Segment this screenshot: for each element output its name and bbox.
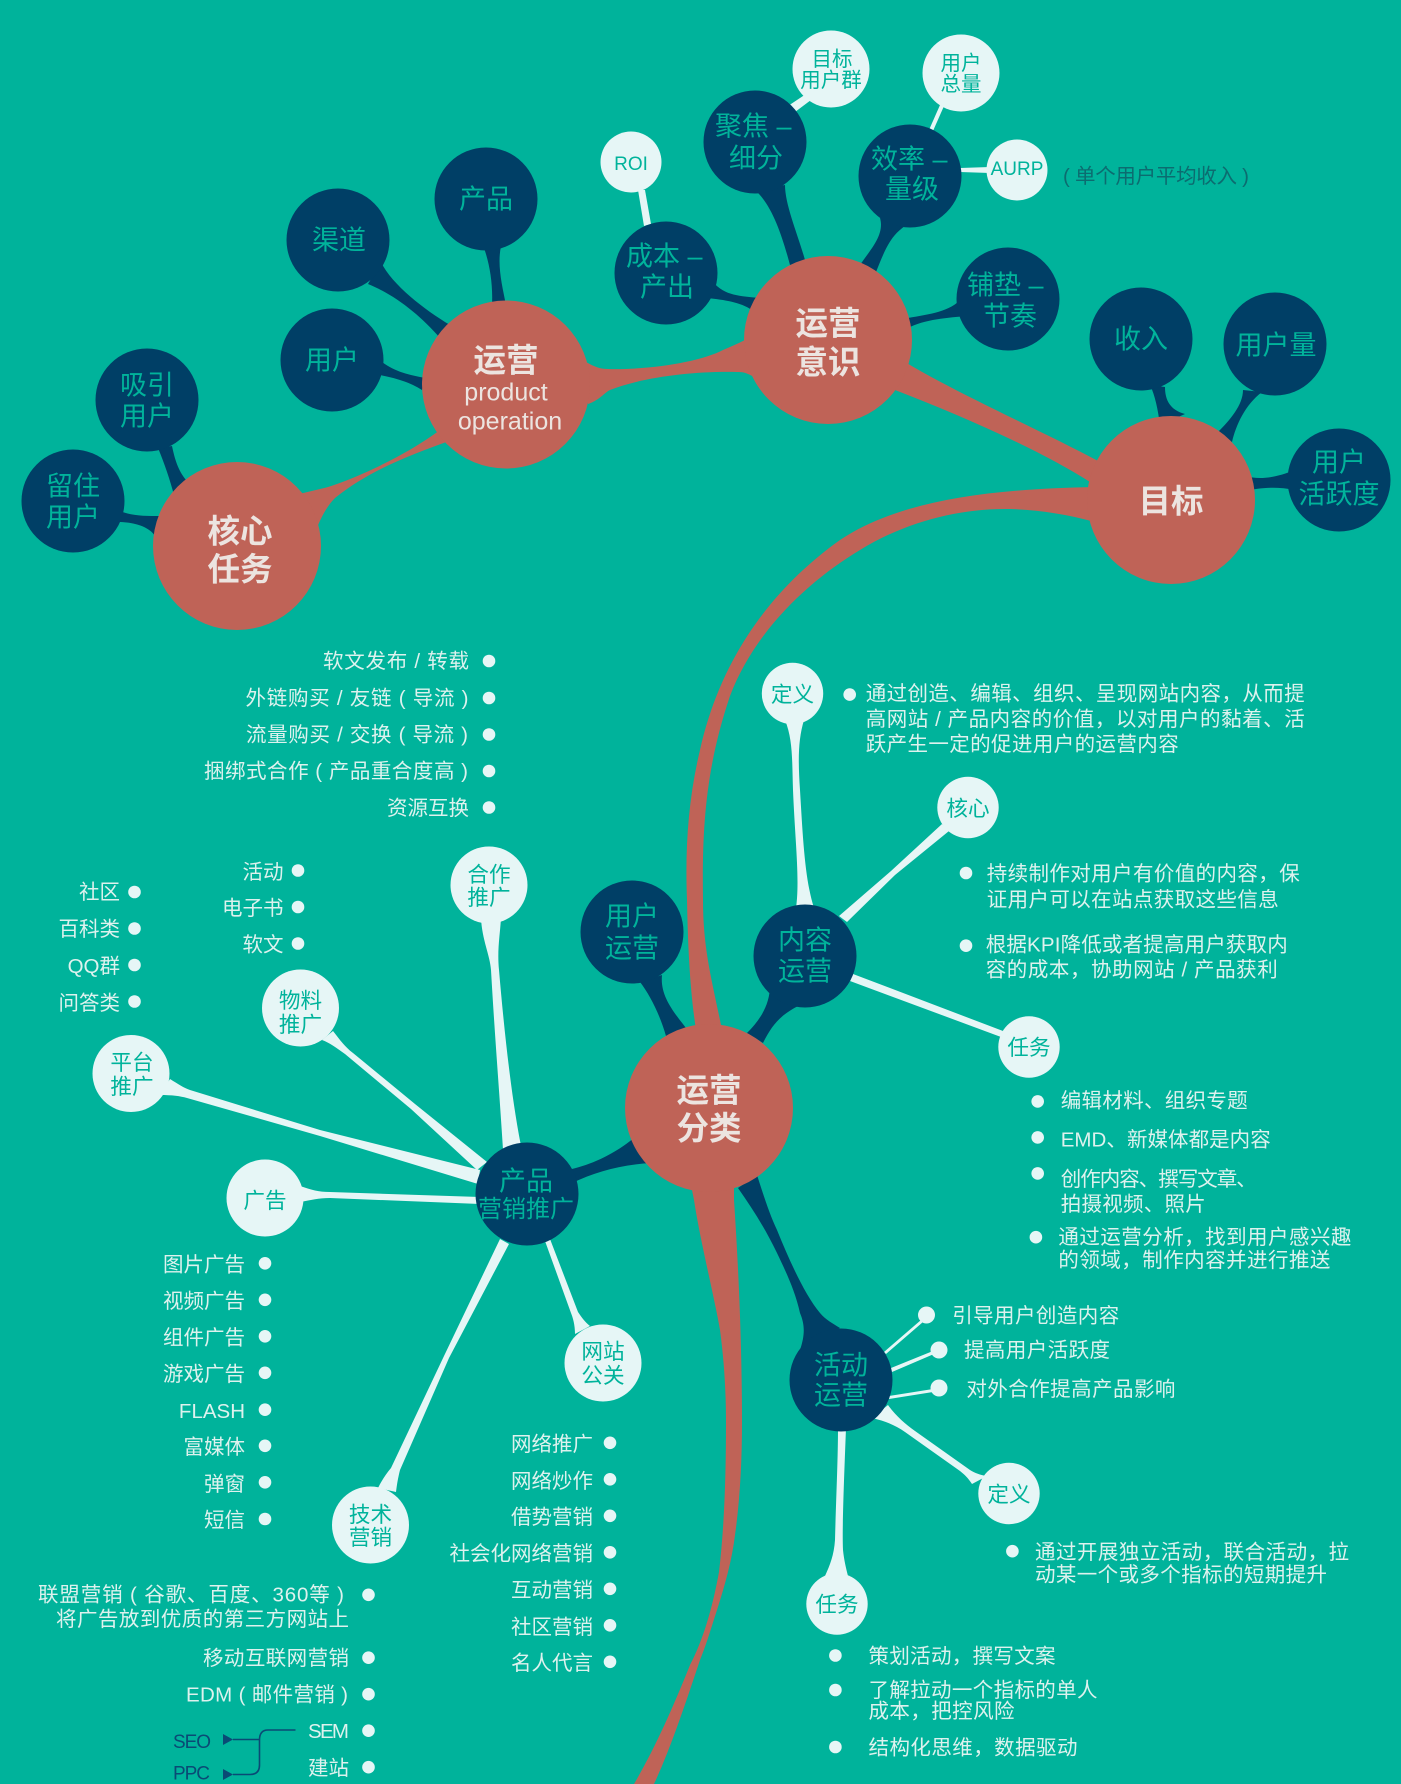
node: 定义 (内容运营) xyxy=(762,663,823,724)
node: 任务 (活动运营): 任务 xyxy=(815,1592,859,1617)
list: 合作推广 items: 软文发布 / 转载 xyxy=(323,650,469,673)
node: 产品营销推广: 营销推广 xyxy=(478,1196,574,1223)
text: 内容运营 任务: EMD、新媒体都是内容 xyxy=(1061,1129,1271,1152)
list: 平台推广 items: 问答类 xyxy=(58,992,120,1015)
node: 网站公关 xyxy=(564,1324,642,1402)
node: 留住用户 xyxy=(22,450,124,552)
node: 核心任务 xyxy=(153,462,321,630)
node: 产品 xyxy=(434,148,538,250)
node: 运营 product operation: product xyxy=(464,378,548,406)
node: 用户 xyxy=(280,308,384,412)
node: 目标用户群: 用户群 xyxy=(800,69,862,92)
node: 用户量: 用户量 xyxy=(1236,330,1316,360)
node: 用户运营: 用户 xyxy=(605,902,659,932)
node: 运营 product operation: 运营 xyxy=(473,342,539,378)
list: 活动运营 指标: 对外合作提高产品影响 xyxy=(966,1378,1175,1401)
node: 技术营销: 技术 xyxy=(349,1502,392,1527)
list: 广告 items: 图片广告 xyxy=(163,1253,245,1276)
list: 网站公关 items: 社会化网络营销 xyxy=(450,1542,593,1565)
node: 收入: 收入 xyxy=(1114,324,1168,354)
node: 铺垫节奏: 铺垫 – xyxy=(967,270,1044,300)
node: 吸引用户: 用户 xyxy=(120,402,174,432)
node: 目标用户群: 目标 xyxy=(812,48,852,71)
branches: light leaf connectors xyxy=(160,94,1003,1576)
node: 用户活跃度: 用户 xyxy=(1312,448,1366,478)
branches: main red trunk xyxy=(295,340,1100,1784)
list: 活动运营 指标: 提高用户活跃度 xyxy=(964,1339,1110,1362)
node: 活动运营 xyxy=(790,1328,892,1432)
list: 平台推广 items xyxy=(58,881,141,1015)
text: 内容运营 核心: 证用户可以在站点获取这些信息 xyxy=(987,889,1279,912)
node: 定义 (活动运营) xyxy=(978,1463,1040,1524)
node: 平台推广: 推广 xyxy=(110,1074,154,1099)
text: 内容运营 核心: 容的成本，协助网站 / 产品获利 xyxy=(986,959,1278,982)
list: 技术营销 items: 将广告放到优质的第三方网站上 xyxy=(56,1608,349,1631)
list: 物料推广 items xyxy=(222,861,304,956)
node: 成本产出: 成本 – xyxy=(626,242,703,272)
node: 效率量级: 量级 xyxy=(885,174,939,204)
node: 物料推广: 推广 xyxy=(279,1012,322,1037)
node: 成本产出 xyxy=(614,222,718,324)
list: 物料推广 items: 活动 xyxy=(242,861,284,884)
node: 运营分类: 分类 xyxy=(676,1110,742,1146)
list: 网站公关 items xyxy=(450,1433,616,1675)
node: 用户活跃度: 活跃度 xyxy=(1298,480,1380,510)
node: 核心: 核心 xyxy=(946,796,990,821)
node: 广告 xyxy=(226,1160,304,1236)
list: 技术营销 items: 联盟营销 ( 谷歌、百度、360等 ) xyxy=(38,1584,344,1607)
node: 任务 (活动运营) xyxy=(806,1573,868,1635)
node: 用户: 用户 xyxy=(305,346,359,376)
node: 用户总量: 总量 xyxy=(940,73,982,96)
node: 核心 xyxy=(937,777,999,838)
text: 活动运营 任务: 成本，把控风险 xyxy=(868,1700,1015,1723)
node: AURP xyxy=(986,140,1048,200)
node: 物料推广 xyxy=(262,970,339,1046)
node: 铺垫节奏: 节奏 xyxy=(983,302,1037,332)
node: 留住用户: 用户 xyxy=(46,502,100,532)
node: 合作推广 xyxy=(450,846,528,924)
node: 广告: 广告 xyxy=(243,1188,287,1213)
text: 内容运营 核心: 持续制作对用户有价值的内容，保 xyxy=(987,863,1300,886)
list: 活动运营 指标: 引导用户创造内容 xyxy=(952,1305,1119,1328)
list: 平台推广 items: QQ群 xyxy=(68,955,120,978)
list: 技术营销 items: EDM ( 邮件营销 ) xyxy=(186,1684,348,1706)
list: 合作推广 items: 流量购买 / 交换 ( 导流 ) xyxy=(246,724,468,746)
list: 广告 items: 视频广告 xyxy=(163,1290,245,1313)
list: 网站公关 items: 借势营销 xyxy=(511,1506,593,1529)
node: 物料推广: 物料 xyxy=(279,988,322,1013)
list: 平台推广 items: 社区 xyxy=(79,881,120,904)
node: 任务 (内容运营) xyxy=(998,1016,1060,1078)
node: 运营意识: 意识 xyxy=(795,344,861,380)
node: 目标用户群 xyxy=(792,30,870,108)
text: 内容运营 核心: 根据KPI降低或者提高用户获取内 xyxy=(986,933,1288,956)
text: 内容运营 任务: 创作内容、撰写文章、 xyxy=(1061,1168,1257,1191)
node: 平台推广: 平台 xyxy=(110,1050,154,1075)
list: 技术营销 items: 建站 xyxy=(308,1757,349,1780)
node: 活动运营: 活动 xyxy=(814,1350,868,1380)
node: 渠道 xyxy=(286,188,390,292)
node: 成本产出: 产出 xyxy=(640,272,694,302)
node: 吸引用户 xyxy=(96,348,198,452)
branches: dark blue sub-topics xyxy=(118,185,1295,1350)
node: 内容运营 xyxy=(754,904,856,1008)
text: 活动运营 任务: 结构化思维，数据驱动 xyxy=(868,1737,1078,1760)
node: 网站公关: 网站 xyxy=(581,1339,625,1364)
text: 内容运营 任务 xyxy=(1030,1090,1351,1272)
node: 核心任务: 核心 xyxy=(207,514,273,550)
node: 定义 (内容运营): 定义 xyxy=(771,682,814,707)
node: 运营分类: 运营 xyxy=(676,1072,742,1108)
node: 用户运营: 运营 xyxy=(605,934,659,964)
node: 运营意识 xyxy=(744,256,912,424)
node: 收入 xyxy=(1090,288,1192,390)
text: 活动运营 任务: 了解拉动一个指标的单人 xyxy=(868,1679,1098,1702)
text: 内容运营 核心 xyxy=(960,863,1300,982)
text: 活动运营 任务: 策划活动，撰写文案 xyxy=(868,1645,1056,1668)
node: 运营意识: 运营 xyxy=(795,306,861,342)
list: 广告 items: FLASH xyxy=(179,1400,245,1423)
node: 产品: 产品 xyxy=(459,184,513,214)
node: 用户量 xyxy=(1224,292,1326,396)
list: 物料推广 items: 软文 xyxy=(242,934,284,956)
node: 留住用户: 留住 xyxy=(46,472,100,502)
node: 用户总量: 用户 xyxy=(940,52,982,75)
list: 平台推广 items: 百科类 xyxy=(58,918,120,941)
node: 核心任务: 任务 xyxy=(207,552,273,588)
node: 内容运营: 运营 xyxy=(778,956,832,986)
list: 广告 items: 富媒体 xyxy=(184,1436,245,1459)
node: 网站公关: 公关 xyxy=(581,1363,625,1388)
node: 运营分类 xyxy=(625,1024,793,1192)
text: 活动运营 任务 xyxy=(829,1645,1098,1760)
text: 内容运营 任务: 拍摄视频、照片 xyxy=(1061,1193,1206,1216)
node: 平台推广 xyxy=(92,1035,170,1112)
node: 效率量级 xyxy=(858,124,962,228)
text: 内容运营 任务: 的领域，制作内容并进行推送 xyxy=(1058,1249,1330,1272)
node: 定义 (活动运营): 定义 xyxy=(987,1482,1031,1507)
node: 聚焦细分: 聚焦 – xyxy=(715,112,792,142)
list: 技术营销 items: SEM xyxy=(308,1720,349,1743)
text: 内容运营 任务: 通过运营分析，找到用户感兴趣 xyxy=(1058,1226,1351,1249)
node: 用户活跃度 xyxy=(1288,428,1390,532)
node: 渠道: 渠道 xyxy=(312,226,366,256)
list: 合作推广 items: 外链购买 / 友链 ( 导流 ) xyxy=(246,687,468,710)
node: 活动运营: 运营 xyxy=(814,1380,868,1410)
text: 内容运营 任务: 编辑材料、组织专题 xyxy=(1061,1090,1248,1112)
node: 合作推广: 合作 xyxy=(467,862,511,887)
node: 用户运营 xyxy=(580,880,684,984)
list: 广告 items: 短信 xyxy=(204,1509,245,1532)
node: 目标: 目标 xyxy=(1138,484,1204,520)
list: 物料推广 items: 电子书 xyxy=(222,897,284,920)
node: AURP: AURP xyxy=(991,159,1043,180)
text: 活动运营 定义: 动某一个或多个指标的短期提升 xyxy=(1035,1564,1327,1587)
note: 单个用户平均收入: ( 单个用户平均收入 ) xyxy=(1063,165,1249,188)
text: 内容运营 定义: 跃产生一定的促进用户的运营内容 xyxy=(866,733,1179,756)
node: 吸引用户: 吸引 xyxy=(120,370,174,400)
node: 用户总量 xyxy=(922,34,1000,112)
text: 内容运营 定义: 高网站 / 产品内容的价值，以对用户的黏着、活 xyxy=(866,708,1305,731)
callout: SEO / PPC bracket xyxy=(173,1730,296,1784)
text: 内容运营 定义 xyxy=(843,683,1305,756)
node: 合作推广: 推广 xyxy=(467,885,511,910)
list: 广告 items: 游戏广告 xyxy=(163,1363,245,1386)
node: 运营 product operation: operation xyxy=(458,408,562,436)
list: 广告 items: 弹窗 xyxy=(204,1473,245,1496)
node: 聚焦细分: 细分 xyxy=(729,144,783,174)
list: 网站公关 items: 互动营销 xyxy=(511,1579,593,1602)
node: 目标 xyxy=(1087,416,1255,584)
node: 产品营销推广: 产品 xyxy=(499,1166,553,1196)
text: 活动运营 定义 xyxy=(1006,1541,1349,1587)
node: ROI xyxy=(600,132,662,192)
list: 技术营销 items: 移动互联网营销 xyxy=(203,1647,349,1670)
node: 技术营销: 营销 xyxy=(349,1525,392,1550)
node: 内容运营: 内容 xyxy=(778,926,832,956)
list: 技术营销 items xyxy=(38,1584,375,1780)
list: 网站公关 items: 网络炒作 xyxy=(511,1470,593,1493)
node: 任务 (内容运营): 任务 xyxy=(1007,1035,1051,1060)
list: 合作推广 items: 捆绑式合作 ( 产品重合度高 ) xyxy=(204,760,468,783)
list: 合作推广 items xyxy=(204,650,495,820)
callout: SEO / PPC bracket: SEO xyxy=(173,1732,211,1753)
list: 广告 items: 组件广告 xyxy=(163,1326,245,1349)
list: 网站公关 items: 名人代言 xyxy=(511,1652,593,1675)
list: 网站公关 items: 网络推广 xyxy=(511,1433,593,1456)
node: ROI: ROI xyxy=(614,154,648,175)
node: 运营 product operation xyxy=(422,300,590,468)
text: 活动运营 定义: 通过开展独立活动，联合活动，拉 xyxy=(1035,1541,1349,1564)
list: 广告 items xyxy=(163,1253,271,1532)
callout: SEO / PPC bracket: PPC xyxy=(173,1764,210,1784)
node: 聚焦细分 xyxy=(704,90,806,194)
list: 合作推广 items: 资源互换 xyxy=(387,797,469,820)
node: 铺垫节奏 xyxy=(956,248,1060,350)
node: 技术营销 xyxy=(332,1486,409,1564)
node: 效率量级: 效率 – xyxy=(871,144,948,174)
node: 产品营销推广 xyxy=(476,1142,578,1246)
list: 活动运营 指标 xyxy=(918,1305,1175,1401)
text: 内容运营 定义: 通过创造、编辑、组织、呈现网站内容，从而提 xyxy=(866,683,1305,706)
list: 网站公关 items: 社区营销 xyxy=(511,1616,593,1639)
